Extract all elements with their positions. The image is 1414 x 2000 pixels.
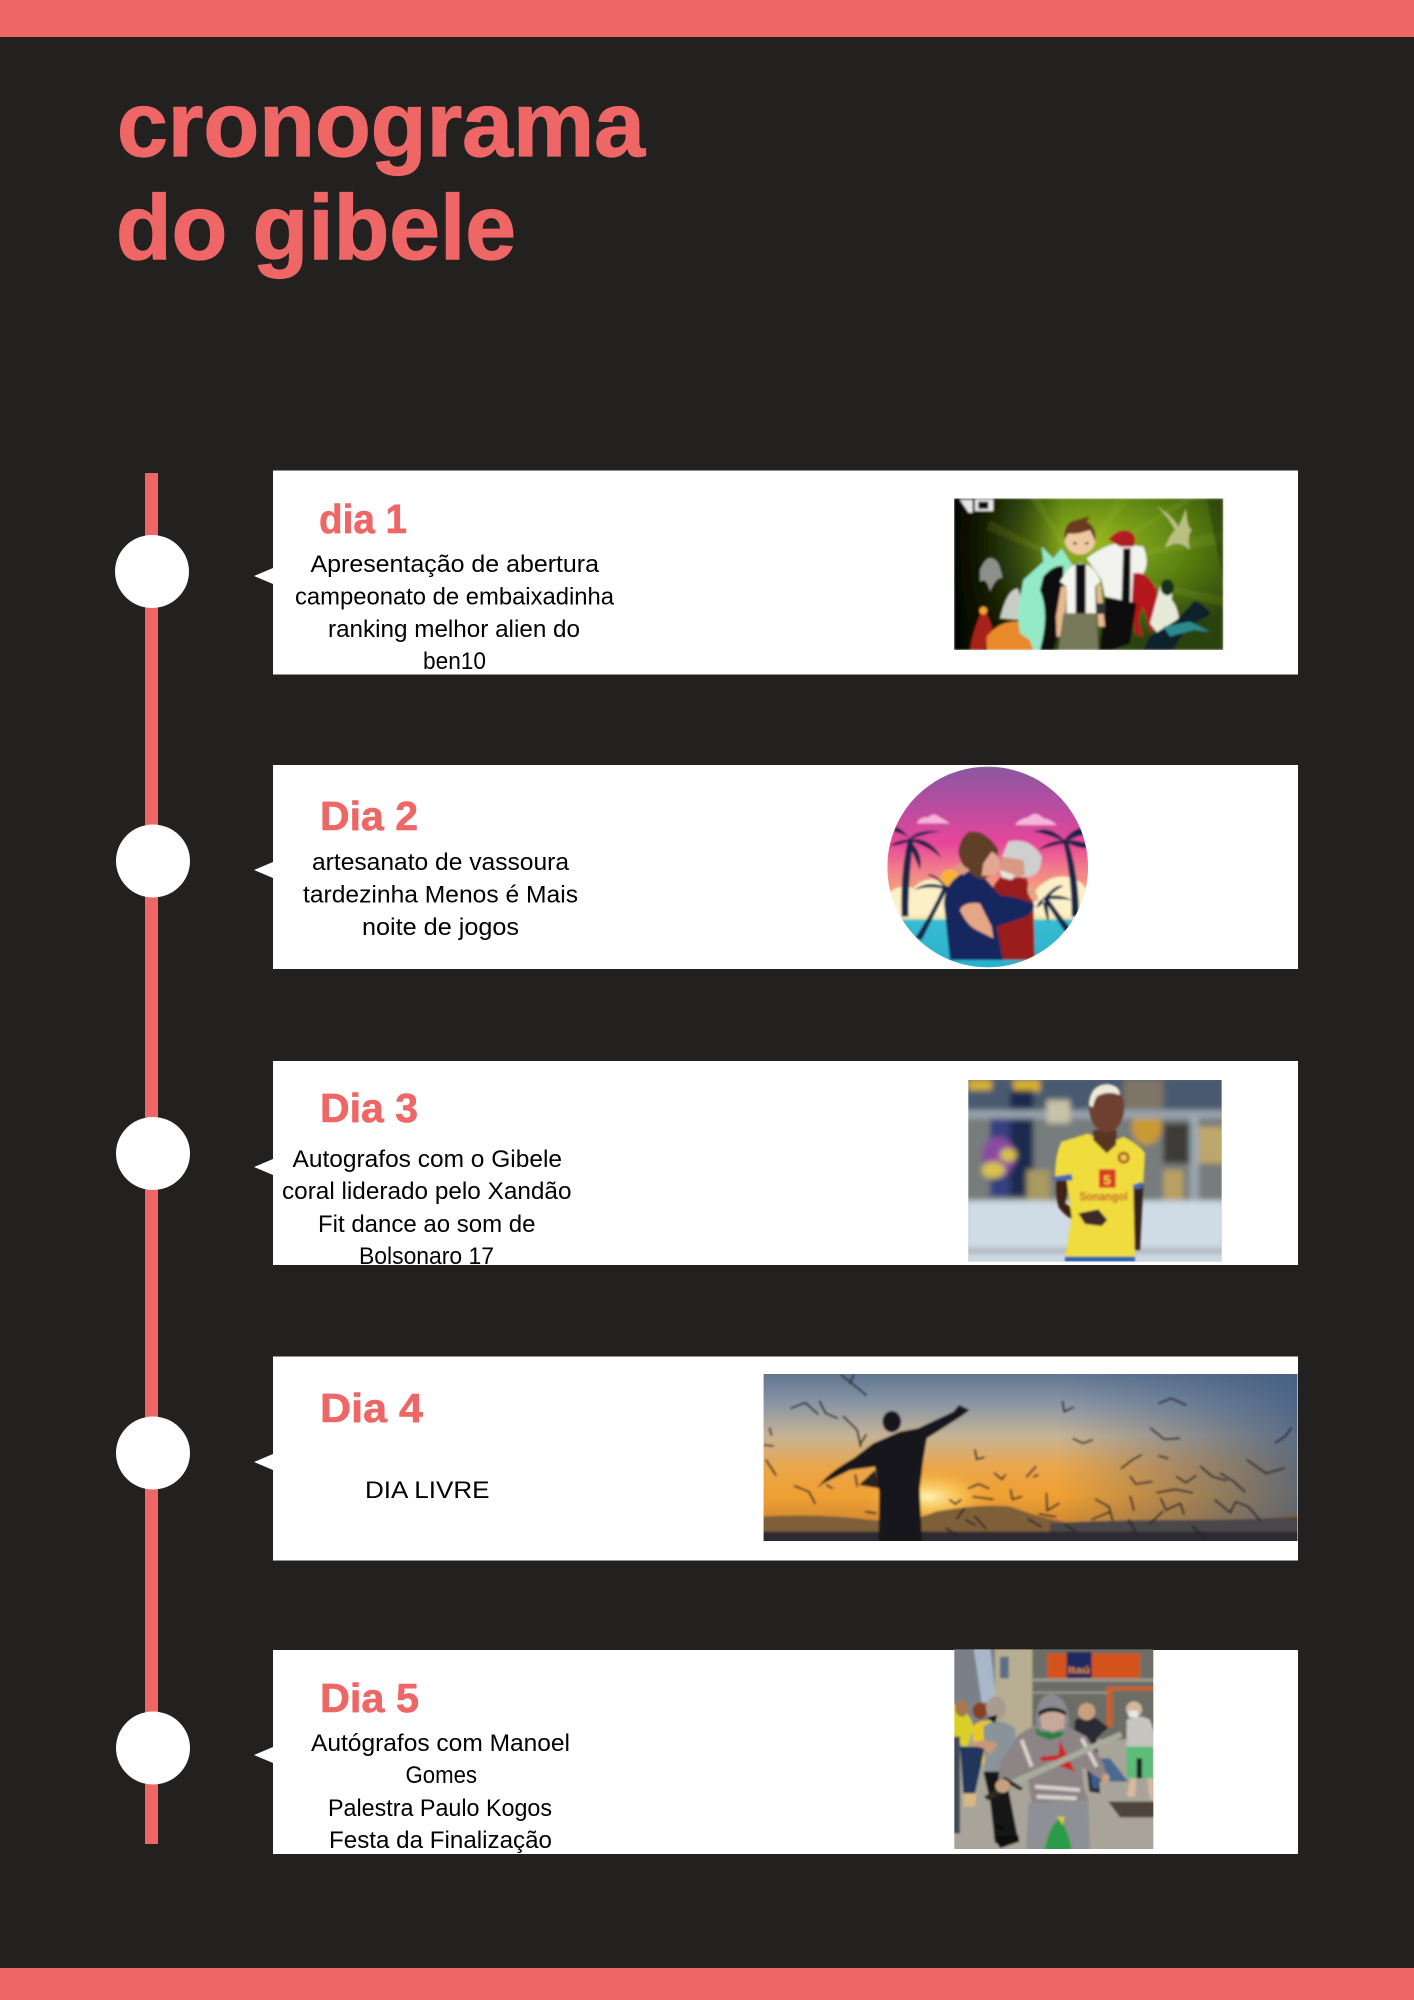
text: dia 2 activities: noite de jogos [362, 914, 519, 941]
text: dia 2 activities [303, 849, 578, 941]
timeline marker: dia 5 [116, 1712, 190, 1784]
text: dia 5 activities [311, 1730, 570, 1854]
panel: dia 1 [254, 470, 1298, 675]
timeline marker: dia 4 [116, 1416, 190, 1490]
title: do gibele [116, 177, 516, 279]
timeline marker: dia 1 [115, 535, 189, 608]
text: dia 3 activities: Bolsonaro 17 [359, 1243, 494, 1270]
text: dia 3 activities: coral liderado pelo Xandão [282, 1178, 572, 1205]
panel: dia 3 [254, 1061, 1298, 1270]
image: football player in yellow jersey [965, 1077, 1225, 1265]
heading: dia 5: Dia 5 [320, 1675, 419, 1721]
title: cronograma [117, 74, 646, 176]
image: football player in yellow jersey: Sonangol [1079, 1190, 1128, 1204]
image: silhouette of man with birds at sunset [760, 1371, 1301, 1544]
text: dia 1 activities: ben10 [423, 648, 486, 675]
bottom accent bar [0, 1968, 1414, 2000]
text: dia 5 activities: Gomes [406, 1762, 477, 1789]
text: dia 4: DIA LIVRE [365, 1477, 490, 1504]
text: dia 1 activities: Apresentação de abertura [310, 551, 600, 578]
panel: dia 2 [254, 765, 1298, 969]
heading: dia 2: Dia 2 [320, 793, 418, 839]
text: dia 1 activities [295, 551, 615, 675]
title [116, 74, 646, 279]
text: dia 1 activities: ranking melhor alien do [328, 616, 580, 643]
text: dia 2 activities: artesanato de vassoura [312, 849, 570, 876]
heading: dia 1: dia 1 [319, 496, 407, 542]
image: ben 10 characters [954, 498, 1223, 650]
timeline marker: dia 3 [116, 1117, 190, 1190]
panel: dia 5 [254, 1646, 1298, 1854]
image: man with sword on the street [951, 1646, 1157, 1852]
text: dia 5 activities: Autógrafos com Manoel [311, 1730, 570, 1757]
top accent bar [0, 0, 1414, 37]
image: football player in yellow jersey: 5 [1103, 1172, 1111, 1187]
text: dia 3 activities: Autografos com o Gibele [292, 1146, 562, 1173]
heading: dia 4: Dia 4 [320, 1385, 423, 1431]
text: dia 2 activities: tardezinha Menos é Mais [303, 882, 578, 908]
panel: dia 4 [254, 1356, 1301, 1560]
heading: dia 3: Dia 3 [320, 1085, 418, 1131]
text: dia 3 activities: Fit dance ao som de [318, 1211, 536, 1238]
image: circular beach illustration [887, 766, 1090, 969]
text: dia 3 activities [282, 1146, 572, 1270]
text: dia 5 activities: Palestra Paulo Kogos [328, 1795, 552, 1822]
text: dia 5 activities: Festa da Finalização [329, 1827, 552, 1854]
timeline line [145, 473, 158, 1844]
text: dia 1 activities: campeonato de embaixadinha [295, 584, 615, 610]
image: man with sword on the street: Itaú [1068, 1665, 1090, 1676]
timeline marker: dia 2 [116, 824, 190, 898]
